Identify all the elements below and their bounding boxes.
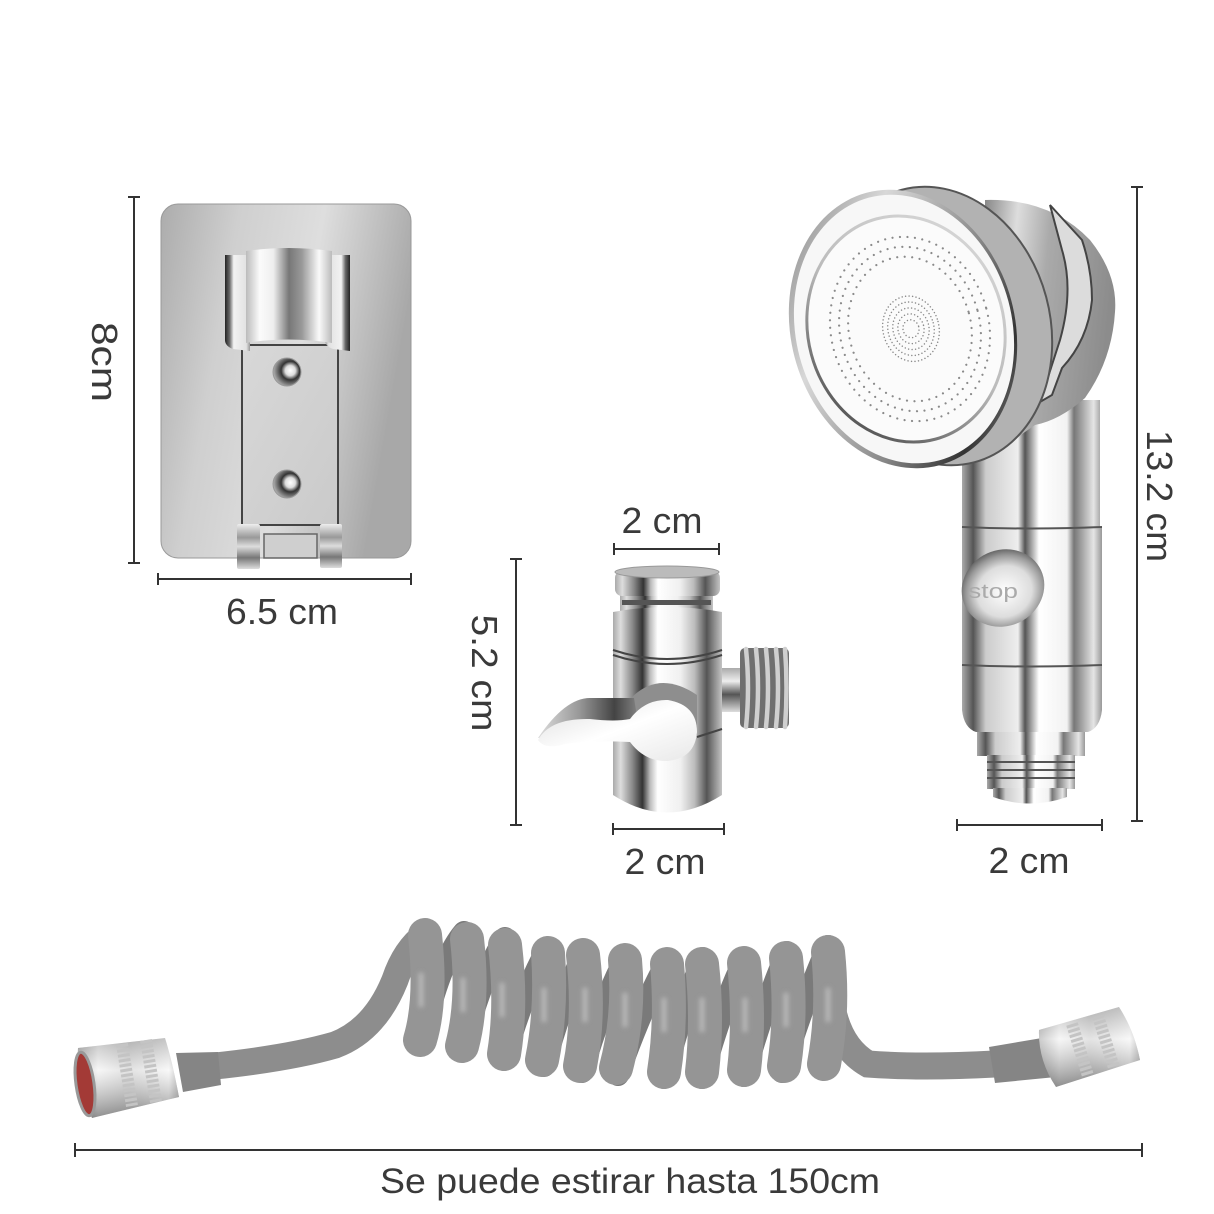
dimension: 2 cm valve bottom: 2 cm xyxy=(624,841,706,882)
right nut xyxy=(1039,1007,1140,1087)
valve neck xyxy=(620,592,713,612)
dimension: 13.2 cm handle height xyxy=(1131,187,1180,821)
dimension: 2 cm valve top: 2 cm xyxy=(622,500,702,541)
body seam xyxy=(613,650,722,737)
coil highlights xyxy=(421,975,828,1030)
dimension: hose length line xyxy=(75,1143,1142,1157)
stop button xyxy=(949,536,1057,640)
wall bracket xyxy=(161,204,411,569)
valve top cap xyxy=(615,566,720,596)
dimension: 6.5 cm width: 6.5 cm xyxy=(226,591,338,632)
lever top shade xyxy=(538,698,640,738)
hinge left xyxy=(237,524,260,569)
dimension: 5.2 cm valve height: 5.2 cm xyxy=(464,614,505,732)
bracket strip xyxy=(242,345,338,525)
clamp right side xyxy=(325,255,350,351)
lower screw xyxy=(273,470,301,498)
dimension: 5.2 cm valve height xyxy=(464,559,522,825)
dimension: 2 cm handle width xyxy=(957,819,1102,881)
hinge bar xyxy=(264,534,317,558)
handle body xyxy=(962,400,1102,732)
back strands xyxy=(422,932,828,1078)
adhesive plate xyxy=(161,204,411,558)
threaded outlet xyxy=(718,648,789,728)
left nut xyxy=(72,1038,179,1118)
right straight hose xyxy=(829,960,995,1066)
clamp left side xyxy=(225,255,250,351)
knob collar xyxy=(632,683,697,735)
rear hex detail xyxy=(1040,205,1092,402)
dimension: 8cm height xyxy=(84,197,140,563)
upper screw xyxy=(273,358,301,386)
handle lower thread xyxy=(977,730,1085,804)
dimension: 6.5 cm width xyxy=(158,573,411,632)
clamp barrel xyxy=(246,248,332,343)
hinge right xyxy=(320,524,342,568)
right ferrule xyxy=(989,1038,1056,1083)
valve body xyxy=(613,607,722,812)
front strands xyxy=(420,935,830,1072)
dimension: 2 cm valve top xyxy=(614,500,719,555)
coiled hose xyxy=(72,932,1140,1118)
head face xyxy=(782,194,1030,464)
diverter valve xyxy=(538,566,789,812)
shower head xyxy=(758,161,1115,804)
lever handle xyxy=(538,700,697,761)
hose length caption: Se puede estirar hasta 150cm xyxy=(380,1162,880,1201)
dimension: 2 cm handle width: 2 cm xyxy=(988,840,1070,881)
handle seams xyxy=(962,527,1102,666)
left ferrule xyxy=(176,1052,221,1092)
head rim xyxy=(758,164,1048,494)
dimension: 2 cm valve bottom xyxy=(613,823,724,882)
left straight hose xyxy=(215,935,425,1066)
head collar band xyxy=(793,161,1083,491)
dimension: 8cm height: 8cm xyxy=(84,322,125,402)
head rear housing xyxy=(985,200,1115,460)
stop button: stop xyxy=(968,581,1018,603)
spray holes xyxy=(810,219,1010,439)
dimension: 13.2 cm handle height: 13.2 cm xyxy=(1139,430,1180,562)
